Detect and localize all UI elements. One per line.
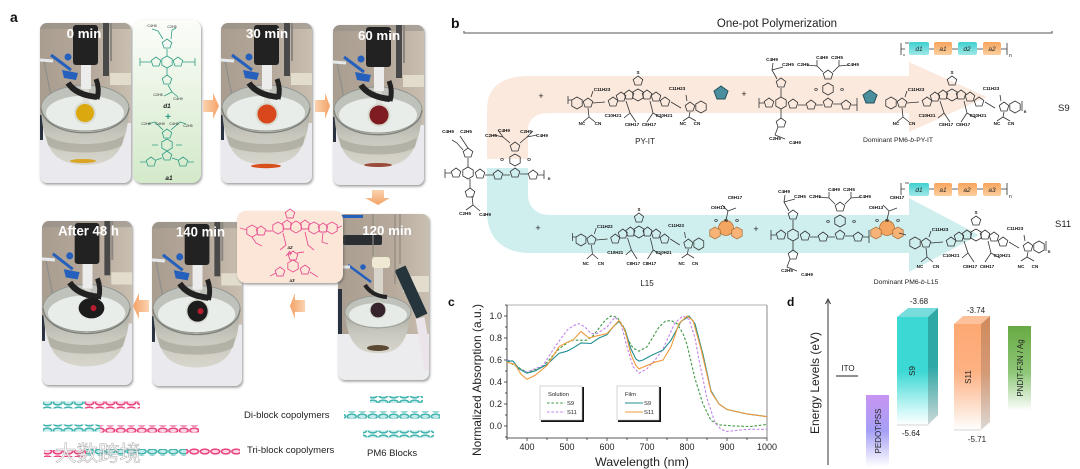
watermark text: 大数跨境 xyxy=(55,442,141,466)
panel a: reaction photo sequence xyxy=(40,20,429,386)
molecule: PY unit of top block: S xyxy=(950,70,954,75)
curve: Film S11 xyxy=(507,316,767,417)
PM6 block chains xyxy=(344,396,440,438)
x tick labels: 900 xyxy=(719,442,735,452)
molecule: PM6 unit of bottom block: C2H5 xyxy=(843,187,855,192)
y tick labels: 0.0 xyxy=(489,421,502,431)
molecule: PY-IT xyxy=(568,70,706,127)
photo: 140 min xyxy=(152,222,242,386)
molecule: PM6 unit of top block: C4H9 xyxy=(847,62,859,67)
molecule: L15: C8H17 xyxy=(626,261,641,266)
x tick labels: 1000 xyxy=(757,442,777,452)
block scheme: d1 a1 a2 a3: a3 xyxy=(988,187,996,194)
curve: Solution S9 xyxy=(507,316,767,427)
monomer labels: + xyxy=(165,112,171,123)
molecule: PM6: C4H9 xyxy=(479,212,491,217)
photo: 0 min: 0 min xyxy=(67,26,101,41)
molecule: L15 unit of bottom block: C8H17 xyxy=(980,264,995,269)
molecule: PY unit of top block: CN xyxy=(909,121,916,126)
molecule: PM6 unit of bottom block: C2H5 xyxy=(781,268,793,273)
x tick labels: 800 xyxy=(679,442,695,452)
block scheme: d1 a1 d2 a2: d2 xyxy=(963,46,971,53)
icon: orange L15 acceptor: N xyxy=(724,218,728,223)
molecule: PY-IT: NC xyxy=(579,121,586,126)
x tick labels: 500 xyxy=(559,442,575,452)
di-block chain 1 xyxy=(43,402,140,408)
molecule: PM6 unit of top block: C4H9 xyxy=(816,55,828,60)
label: plus: + xyxy=(741,89,747,99)
photo: 120 min: 120 min xyxy=(362,223,412,238)
molecule: PM6: C4H9 xyxy=(442,129,454,134)
monomer labels: + xyxy=(288,251,292,258)
panel label b: b xyxy=(451,15,460,31)
axis title: Normalized Absorption (a.u.): Normalized Absorption (a.u.) xyxy=(470,304,484,456)
molecule: PM6 unit of bottom block: C2H5 xyxy=(794,194,806,199)
molecule: PM6: n xyxy=(548,176,551,181)
y tick labels: 1.0 xyxy=(489,311,502,321)
molecule: PY unit of top block: C10H21 xyxy=(919,113,936,118)
molecule: PM6: C2H5 xyxy=(520,129,532,134)
block scheme: d1 a1 d2 a2: n xyxy=(1009,53,1012,59)
molecule: L15: C8H17 xyxy=(643,261,657,266)
molecule: L15 unit of bottom block: NC xyxy=(1018,264,1025,269)
icon: teal thiophene linker xyxy=(714,86,728,99)
molecule: PM6 unit of bottom block: O xyxy=(852,219,856,224)
molecule: PM6 unit of top block: C2H5 xyxy=(769,136,781,141)
molecule: PM6 unit of bottom block: C4H9 xyxy=(778,189,790,194)
label: Dominant PM6-b-PY-IT: Dominant PM6-b-PY-IT xyxy=(863,137,933,144)
legend: Film xyxy=(617,386,661,422)
di-block chain 2 xyxy=(43,424,199,432)
block scheme: d1 a1 a2 a3: a1 xyxy=(939,187,947,194)
block scheme: d1 a1 a2 a3: n xyxy=(1009,194,1012,200)
icon: orange L15 acceptor: C8H17 xyxy=(728,195,743,200)
molecule: PY-IT: C10H21 xyxy=(605,113,622,118)
legend: Solution: S11 xyxy=(567,410,577,416)
heading: One-pot Polymerization: One-pot Polymerization xyxy=(717,18,837,30)
molecule: PY unit of top block: n xyxy=(1024,109,1027,114)
molecule: PM6: C2H5 xyxy=(459,211,471,216)
molecule: PM6 unit of bottom block xyxy=(771,187,871,277)
molecule: L15: C11H23 xyxy=(597,224,613,229)
monomer labels: a3 xyxy=(289,278,295,283)
molecule: PM6 unit of top block xyxy=(759,55,859,145)
block scheme: d1 a1 a2 a3: d1 xyxy=(915,187,923,194)
molecule: L15 unit of bottom block: CN xyxy=(933,264,940,269)
y tick labels: 0.4 xyxy=(489,377,502,387)
icon: orange L15 acceptor: O xyxy=(735,218,739,223)
photo: 140 min: 140 min xyxy=(176,224,225,239)
monomer labels: C4H9 xyxy=(169,122,179,126)
icon: teal thiophene linker xyxy=(863,90,877,103)
molecule: L15: C11H23 xyxy=(668,223,684,228)
legend: Film: Film xyxy=(625,392,636,398)
molecule: L15: CN xyxy=(598,261,604,266)
molecule: L15: C10H21 xyxy=(656,250,672,255)
x tick labels: 400 xyxy=(519,442,535,452)
block scheme: d1 a1 d2 a2: a1 xyxy=(939,46,947,53)
plot frame and ticks xyxy=(504,305,767,441)
bar: PNDIT-F3N / Ag: PNDIT-F3N / Ag xyxy=(1016,339,1025,397)
y tick labels xyxy=(489,311,502,431)
curve: Solution S11 xyxy=(507,316,767,432)
molecule: L15 unit of bottom block: C11H23 xyxy=(932,227,949,232)
bar: S9: -5.64 xyxy=(902,429,921,438)
molecule: L15 unit of bottom block: C11H23 xyxy=(1007,226,1024,231)
molecule: PY unit of top block: C8H17 xyxy=(956,122,971,127)
molecule: L15 unit of bottom block: S xyxy=(974,210,978,215)
x tick labels xyxy=(519,442,777,452)
panel: a2 and a3 monomers xyxy=(237,209,343,283)
molecule: PM6 xyxy=(442,128,551,217)
label: L15: L15 xyxy=(640,279,654,288)
photo: 60 min xyxy=(333,25,424,185)
molecule: L15 unit of bottom block: C8H17 xyxy=(963,264,978,269)
monomer labels: a1 xyxy=(165,175,173,182)
copolymer chains legend xyxy=(43,396,440,459)
molecule: L15 unit of bottom block xyxy=(899,210,1051,269)
x tick labels: 600 xyxy=(599,442,615,452)
bar: S11: -5.71 xyxy=(968,435,987,444)
molecule: L15: NC xyxy=(679,261,686,266)
photo: 120 min xyxy=(338,214,429,380)
arrow: to After 48 h xyxy=(133,293,149,319)
monomer labels: C4H9 xyxy=(155,122,165,126)
molecule: L15: NC xyxy=(583,261,590,266)
molecule: PM6 unit of top block: C4H9 xyxy=(766,57,778,62)
molecule: PY-IT: CN xyxy=(694,121,701,126)
molecule: PY-IT: S xyxy=(636,70,640,75)
monomer labels xyxy=(141,24,193,182)
molecule: PM6 unit of bottom block: O xyxy=(826,219,830,224)
level: ITO: ITO xyxy=(841,364,855,373)
monomer labels: C2H5 xyxy=(141,122,151,126)
molecule: L15 xyxy=(572,207,704,266)
title rule xyxy=(464,31,1052,33)
bar: PEDOT:PSS: PEDOT:PSS xyxy=(874,409,883,453)
photo: After 48 h xyxy=(42,221,132,385)
panel c: absorption chart xyxy=(470,304,777,469)
bar: S11 xyxy=(954,306,990,444)
monomer labels: C4H9 xyxy=(147,24,157,28)
molecule: PY unit of top block: NC xyxy=(893,121,900,126)
molecule: L15 unit of bottom block: C10H21 xyxy=(994,253,1011,258)
molecule: PM6 unit of top block: O xyxy=(814,87,818,92)
molecule: PY-IT: C8H17 xyxy=(625,122,640,127)
axis title: Energy Levels (eV): Energy Levels (eV) xyxy=(808,332,822,434)
molecule: PM6: C4H9 xyxy=(536,133,548,138)
level: ITO xyxy=(836,364,858,376)
molecule: L15: S xyxy=(637,207,640,212)
molecule: PM6: C2H5 xyxy=(485,133,497,138)
molecule: PY unit of top block: C11H23 xyxy=(983,86,1000,91)
molecule: PY unit of top block: NC xyxy=(994,121,1001,126)
label: Dominant PM6-b-L15: Dominant PM6-b-L15 xyxy=(874,279,939,286)
molecule: PM6 unit of top block: C2H5 xyxy=(797,62,809,67)
label: S11: S11 xyxy=(1055,219,1071,230)
block scheme: d1 a1 d2 a2: a2 xyxy=(988,46,996,53)
bar: S9: S9 xyxy=(908,366,917,376)
bar: S11: -3.74 xyxy=(967,306,986,315)
watermark logo xyxy=(13,434,46,460)
molecule: PY-IT: C8H17 xyxy=(642,122,657,127)
tri-block chain xyxy=(44,448,240,457)
monomer labels xyxy=(287,245,295,283)
molecule: PY unit of top block: C10H21 xyxy=(970,113,987,118)
label: Tri-block copolymers: Tri-block copolymers xyxy=(247,445,335,456)
molecule: PM6 unit of bottom block: C4H9 xyxy=(801,272,813,277)
watermark xyxy=(13,434,141,466)
monomer labels: C2H5 xyxy=(167,25,177,29)
molecule: PM6: C2H5 xyxy=(460,129,472,134)
molecule: PY unit of top block: CN xyxy=(1008,121,1015,126)
label: Di-block copolymers: Di-block copolymers xyxy=(244,410,330,421)
bar: S9: -3.68 xyxy=(910,297,929,306)
icon: orange L15 acceptor xyxy=(869,195,905,239)
arrow: peach PY-IT route xyxy=(487,62,987,159)
molecule: PM6 unit of top block: O xyxy=(840,87,844,92)
monomer labels: C2H5 xyxy=(153,93,163,97)
molecule: L15 unit of bottom block: CN xyxy=(1032,264,1039,269)
bar: S11: S11 xyxy=(964,370,973,384)
arrow: teal L15 route xyxy=(487,168,979,272)
photo: After 48 h: After 48 h xyxy=(58,223,119,238)
molecule: PY unit of top block: C8H17 xyxy=(939,122,954,127)
axis title: Wavelength (nm): Wavelength (nm) xyxy=(595,455,689,469)
photo: 0 min xyxy=(40,23,131,183)
photo: 30 min xyxy=(221,23,312,183)
molecule: L15 unit of bottom block: C10H21 xyxy=(943,253,960,258)
arrow: to 30 min xyxy=(203,93,219,119)
molecule: PM6: O xyxy=(500,157,504,162)
curves: absorption spectra xyxy=(507,316,767,432)
photo: 60 min: 60 min xyxy=(358,28,400,43)
label: plus: + xyxy=(538,91,544,101)
panel: d1 and a1 monomers xyxy=(133,20,201,183)
icon: orange L15 acceptor: O xyxy=(875,218,879,223)
y tick labels: 0.8 xyxy=(489,333,502,343)
label: plus: + xyxy=(535,223,541,233)
molecule: PY-IT: C10H21 xyxy=(656,113,673,118)
monomer labels: C2H5 xyxy=(183,124,193,128)
molecule: PM6 unit of bottom block: C4H9 xyxy=(859,194,871,199)
icon: orange L15 acceptor: C6H13 xyxy=(711,205,726,210)
legend: Film: S11 xyxy=(644,410,654,416)
panel label a: a xyxy=(10,9,18,25)
curve: Film S9 xyxy=(507,316,767,417)
monomer labels: d1 xyxy=(163,103,171,110)
molecule: L15 unit of bottom block: n xyxy=(1048,249,1051,254)
y tick labels: 0.2 xyxy=(489,399,502,409)
molecule: L15 unit of bottom block: NC xyxy=(917,264,924,269)
legend: Solution: S9 xyxy=(567,401,574,407)
icon: orange L15 acceptor: C8H17 xyxy=(890,195,905,200)
legend: Solution xyxy=(540,386,584,422)
legend: Film: S9 xyxy=(644,401,651,407)
molecule: PM6 unit of top block: C2H5 xyxy=(831,55,843,60)
block scheme: d1 a1 d2 a2: d1 xyxy=(915,46,923,53)
molecule: a2 and a3 xyxy=(240,209,342,277)
label: plus: + xyxy=(753,224,759,234)
icon: orange L15 acceptor xyxy=(710,195,743,239)
label: S9: S9 xyxy=(1058,103,1070,114)
molecule: PY unit of top block xyxy=(886,70,1027,127)
icon: orange L15 acceptor: N xyxy=(885,218,889,223)
icon: orange L15 acceptor: O xyxy=(714,218,718,223)
bar: PEDOT:PSS xyxy=(866,395,889,467)
label: PM6 Blocks: PM6 Blocks xyxy=(367,448,417,459)
arrow: to 140 min xyxy=(290,293,305,319)
arrow: to 120 min xyxy=(365,190,390,205)
molecule: PY-IT: C11H23 xyxy=(669,86,686,91)
bar: PNDIT-F3N / Ag xyxy=(1008,326,1031,411)
panel label d: d xyxy=(787,295,794,309)
monomer labels: C4H9 xyxy=(173,97,183,101)
arrow: energy axis xyxy=(826,299,830,465)
arrow: to 60 min xyxy=(315,93,330,119)
label: PY-IT: PY-IT xyxy=(635,137,655,146)
icon: orange L15 acceptor: O xyxy=(896,218,900,223)
icon: orange L15 acceptor: C6H13 xyxy=(869,205,884,210)
molecule: d1 and a1 xyxy=(140,28,195,166)
y tick labels: 0.6 xyxy=(489,355,502,365)
molecule: PY-IT: NC xyxy=(680,121,687,126)
molecule: PY unit of top block: C11H23 xyxy=(908,87,925,92)
molecule: PM6 unit of bottom block: C4H9 xyxy=(828,187,840,192)
photo: 30 min: 30 min xyxy=(246,26,288,41)
monomer labels: a2 xyxy=(287,245,293,250)
molecule: PM6 unit of bottom block: C2H5 xyxy=(809,194,821,199)
block scheme: d1 a1 a2 a3 xyxy=(901,183,1012,200)
legend: Solution: Solution xyxy=(548,392,569,398)
molecule: L15: CN xyxy=(692,261,698,266)
molecule: PM6 unit of top block: C2H5 xyxy=(782,62,794,67)
bar: S9 xyxy=(897,297,938,438)
x tick labels: 700 xyxy=(639,442,655,452)
molecule: PM6 unit of top block: C4H9 xyxy=(789,140,801,145)
molecule: PM6: O xyxy=(527,157,531,162)
block scheme: d1 a1 a2 a3: a2 xyxy=(963,187,971,194)
panel d: energy levels xyxy=(808,297,1031,467)
molecule: PM6: C4H9 xyxy=(498,128,510,133)
panel label c: c xyxy=(448,295,455,309)
molecule: L15: C10H21 xyxy=(607,250,624,255)
molecule: PY-IT: CN xyxy=(595,121,602,126)
molecule: PY-IT: C11H23 xyxy=(594,87,611,92)
block scheme: d1 a1 d2 a2 xyxy=(901,42,1012,59)
